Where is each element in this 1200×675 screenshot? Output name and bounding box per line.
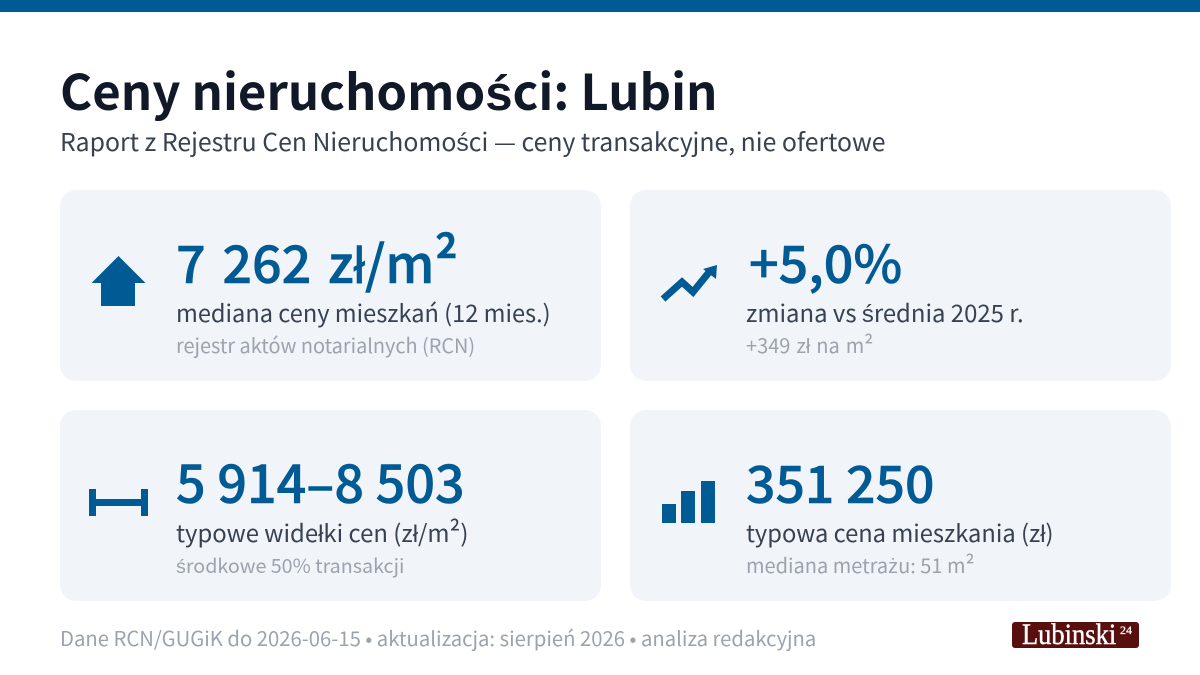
label: typowa cena mieszkania (zł) bbox=[746, 515, 1054, 549]
icon: bar chart bbox=[662, 481, 715, 523]
footer source: Dane RCN/GUGiK do 2026-06-15 • aktualizacja: sierpień 2026 • analiza redakcyjna bbox=[60, 622, 816, 652]
label: typowe widełki cen (zł/m²) bbox=[176, 512, 468, 550]
value: 351 250 bbox=[746, 443, 934, 518]
subtitle: Raport z Rejestru Cen Nieruchomości — ceny transakcyjne, nie ofertowe bbox=[60, 123, 886, 159]
panel: typical price bbox=[630, 410, 1171, 601]
value: +5,0% bbox=[749, 223, 902, 298]
label: mediana ceny mieszkań (12 mies.) bbox=[176, 295, 551, 329]
panel: median price bbox=[60, 190, 601, 381]
logo bbox=[1012, 622, 1139, 648]
note: rejestr aktów notarialnych (RCN) bbox=[176, 330, 475, 359]
icon: range bracket bbox=[89, 489, 148, 516]
value: 7 262 zł/m² bbox=[176, 218, 458, 300]
note: mediana metrażu: 51 m² bbox=[746, 548, 975, 580]
icon: trend arrow bbox=[660, 265, 717, 302]
panel: price range bbox=[60, 410, 601, 601]
note: +349 zł na m² bbox=[746, 328, 873, 360]
logo wordmark: Lubinski bbox=[1022, 617, 1116, 651]
note: środkowe 50% transakcji bbox=[176, 550, 404, 579]
top bar bbox=[0, 0, 1200, 12]
icon: house bbox=[92, 256, 146, 306]
panel: change bbox=[630, 190, 1171, 381]
title: Ceny nieruchomości: Lubin bbox=[60, 54, 717, 125]
label: zmiana vs średnia 2025 r. bbox=[746, 294, 1024, 329]
value: 5 914–8 503 bbox=[176, 443, 465, 518]
logo superscript: 24 bbox=[1120, 623, 1132, 637]
